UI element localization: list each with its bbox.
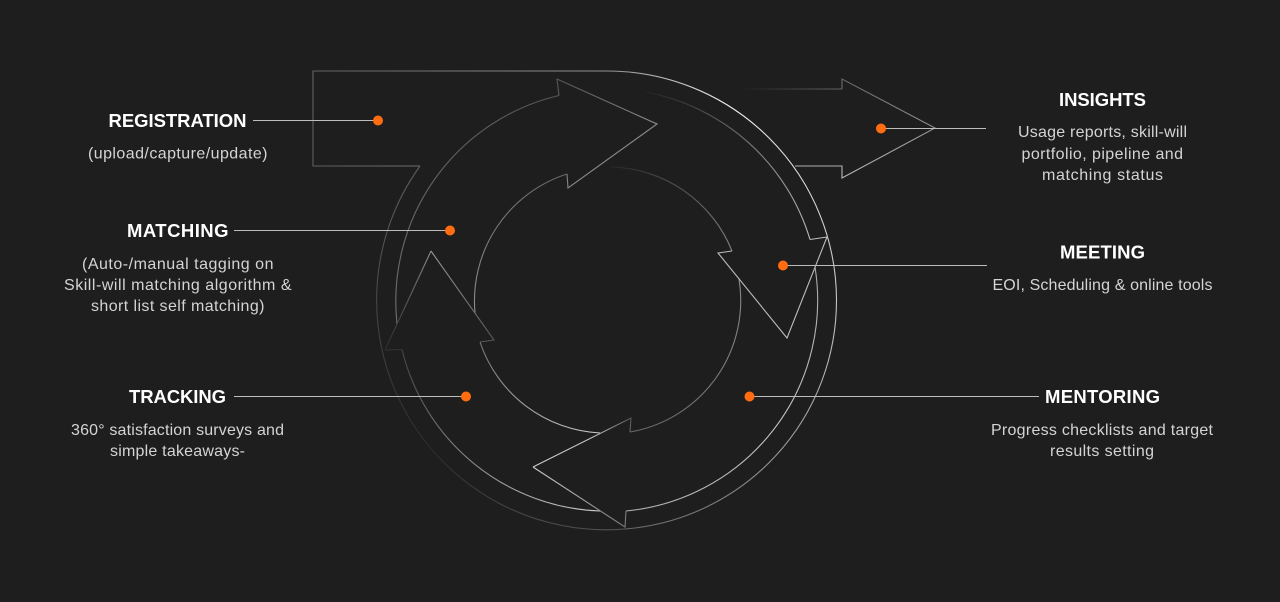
text block: mentoring: results setting xyxy=(1050,443,1154,460)
text block: tracking: simple takeaways- xyxy=(110,443,245,460)
arrowhead: top xyxy=(557,79,657,188)
outer cycle arrow with registration entry and insights exit xyxy=(313,71,837,530)
connector: registration xyxy=(253,116,383,126)
arrowhead: right xyxy=(718,237,827,338)
connector: meeting xyxy=(778,260,987,270)
arrowhead: bottom xyxy=(533,418,631,527)
text block: registration xyxy=(88,110,268,162)
insights exit arrow xyxy=(742,79,935,178)
text block: meeting: MEETING xyxy=(1060,242,1145,262)
text block: tracking: 360° satisfaction surveys and xyxy=(71,422,284,439)
text block: insights: Usage reports, skill-will xyxy=(1018,124,1187,141)
text block: matching: short list self matching) xyxy=(91,298,264,315)
text block: registration: REGISTRATION xyxy=(108,110,246,131)
text block: mentoring xyxy=(991,386,1214,460)
text block: meeting: EOI, Scheduling & online tools xyxy=(992,277,1212,294)
text block: registration: (upload/capture/update) xyxy=(88,146,268,162)
text block: matching: Skill-will matching algorithm & xyxy=(64,277,292,294)
text block: insights: portfolio, pipeline and xyxy=(1022,146,1183,163)
connector: tracking xyxy=(234,392,471,402)
text block: insights: matching status xyxy=(1042,167,1163,184)
middle ring arrows xyxy=(396,92,818,511)
arrowhead: left xyxy=(385,251,494,350)
text block: insights: INSIGHTS xyxy=(1059,89,1146,110)
text block: mentoring: MENTORING xyxy=(1045,386,1160,407)
connector: mentoring xyxy=(744,392,1039,402)
text block: meeting xyxy=(992,242,1212,294)
text block: tracking: TRACKING xyxy=(129,386,226,407)
text block: matching: MATCHING xyxy=(127,220,228,241)
text block: matching xyxy=(64,220,292,315)
text block: insights xyxy=(1018,89,1187,184)
text block: mentoring: Progress checklists and target xyxy=(991,422,1214,439)
text block: matching: (Auto-/manual tagging on xyxy=(82,256,274,273)
text block: tracking xyxy=(71,386,284,460)
connector: insights xyxy=(876,124,986,134)
inner ring arrows xyxy=(474,167,741,433)
connector: matching xyxy=(234,226,455,236)
